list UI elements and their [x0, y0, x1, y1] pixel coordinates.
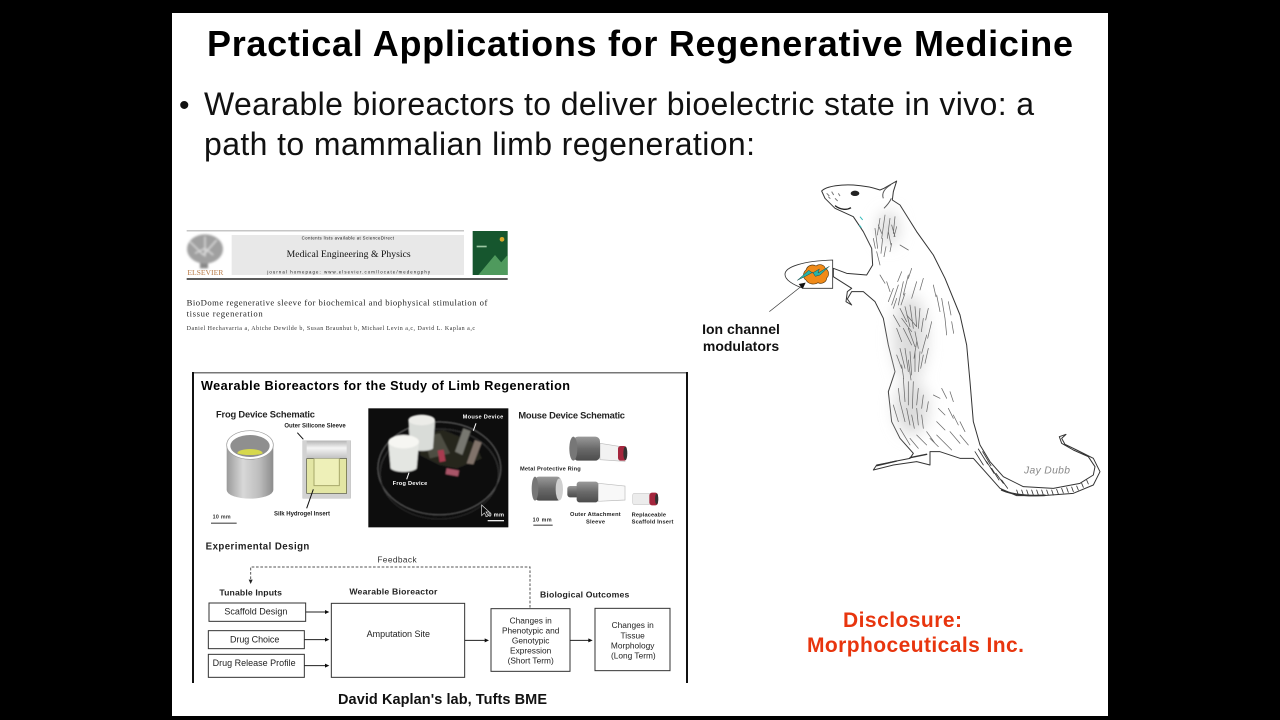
- panel: experimental design flowchart: Drug Release Profile: [213, 658, 296, 668]
- figure heading: Wearable Bioreactors for the Study of Limb Regeneration: [201, 379, 570, 393]
- disclosure note: Morphoceuticals Inc.: [807, 634, 1024, 657]
- mouse device schematic: Scaffold Insert: [632, 520, 673, 526]
- panel: experimental design flowchart: Changes in: [510, 616, 552, 626]
- lab credit: David Kaplan's lab, Tufts BME: [338, 692, 547, 708]
- photo of devices: 10 mm: [485, 512, 504, 518]
- frog device schematic: Outer Silicone Sleeve: [284, 423, 346, 429]
- photo of devices: Frog Device: [393, 481, 427, 487]
- icon: Elsevier logo: [187, 234, 224, 277]
- rat body outline: [822, 181, 1100, 496]
- frog device schematic: Silk Hydrogel Insert: [274, 511, 330, 517]
- frog device schematic: [211, 410, 351, 524]
- panel: experimental design flowchart: Amputation Site: [367, 629, 430, 639]
- panel: journal article header: journal homepage: www.elsevier.com/locate/medengphy: [266, 269, 431, 274]
- icon: Elsevier logo: ELSEVIER: [187, 268, 224, 277]
- panel: experimental design flowchart: Tissue: [621, 630, 645, 640]
- icon: journal cover: [473, 231, 508, 275]
- panel: experimental design flowchart: Wearable Bioreactor: [349, 587, 438, 597]
- panel: experimental design flowchart: Morphology: [611, 640, 655, 650]
- slide background: [172, 13, 1108, 716]
- panel: experimental design flowchart: Tunable Inputs: [219, 587, 282, 597]
- label: ion channel modulators: modulators: [703, 338, 779, 354]
- mouse device schematic: Metal Protective Ring: [520, 466, 581, 472]
- bullet text: Wearable bioreactors to deliver bioelectric state in vivo: a: [204, 86, 1034, 122]
- panel: experimental design flowchart: Expression: [510, 646, 552, 656]
- wearable device on limb: [785, 260, 833, 288]
- panel: journal article header: tissue regeneration: [187, 309, 263, 319]
- disclosure note: [807, 609, 1024, 657]
- panel: experimental design flowchart: Drug Choice: [230, 634, 279, 644]
- bullet text: •: [179, 89, 190, 122]
- panel: experimental design flowchart: Phenotypic and: [502, 626, 560, 636]
- panel: journal article header: [187, 230, 508, 332]
- photo of devices: [368, 408, 508, 527]
- mouse device schematic: [518, 410, 673, 526]
- panel: journal article header: Contents lists available at ScienceDirect: [302, 235, 395, 240]
- frog device schematic: Frog Device Schematic: [216, 410, 315, 420]
- panel: wearable bioreactors figure: [192, 372, 688, 683]
- panel: journal article header: Daniel Hechavarria a, Abiche Dewilde b, Susan Braunhut b, Michael Levin a,c, David L. Kaplan a,c: [187, 326, 475, 332]
- feedback loop arrow: [249, 554, 530, 608]
- label: ion channel modulators: [702, 321, 780, 354]
- panel: experimental design flowchart: (Short Term): [508, 656, 554, 666]
- panel: journal article header: BioDome regenerative sleeve for biochemical and biophysical stimulation of: [187, 298, 487, 308]
- bullet text: path to mammalian limb regeneration:: [204, 126, 755, 162]
- panel: experimental design flowchart: Experimental Design: [206, 542, 309, 553]
- mouse device schematic: Replaceable: [632, 512, 666, 518]
- panel: journal article header: Medical Engineering & Physics: [287, 249, 411, 260]
- mouse device schematic: 10 mm: [533, 518, 552, 524]
- flow arrows: [304, 612, 589, 666]
- mouse device schematic: Sleeve: [586, 519, 605, 525]
- mouse device schematic: Mouse Device Schematic: [518, 410, 625, 420]
- mouse device schematic: Outer Attachment: [570, 512, 621, 518]
- panel: experimental design flowchart: Changes in: [612, 620, 654, 630]
- artist signature: Jay Dubb: [1023, 465, 1070, 476]
- panel: experimental design flowchart: (Long Term): [611, 650, 656, 660]
- panel: experimental design flowchart: [206, 542, 670, 677]
- photo of devices: Mouse Device: [463, 415, 503, 421]
- tail hatching: [877, 449, 1088, 496]
- panel: experimental design flowchart: Biological Outcomes: [540, 590, 630, 600]
- disclosure note: Disclosure:: [843, 609, 962, 632]
- title: Practical Applications for Regenerative Medicine: [207, 23, 1073, 64]
- panel: experimental design flowchart: Genotypic: [512, 636, 549, 646]
- frog device schematic: 10 mm: [213, 515, 231, 521]
- fur strokes: [873, 215, 968, 450]
- icon: mouse cursor: [482, 505, 489, 517]
- panel: device schematics: [201, 379, 673, 527]
- feedback loop arrow: Feedback: [377, 554, 417, 564]
- panel: experimental design flowchart: Scaffold Design: [224, 607, 287, 617]
- bullet text: [179, 86, 1034, 162]
- arrow to device: [769, 283, 806, 312]
- fur shading soft: [878, 212, 928, 435]
- rat face: [827, 185, 891, 228]
- input boxes: [208, 603, 670, 677]
- label: ion channel modulators: Ion channel: [702, 321, 780, 337]
- illustration: standing rat with device: [769, 181, 1100, 496]
